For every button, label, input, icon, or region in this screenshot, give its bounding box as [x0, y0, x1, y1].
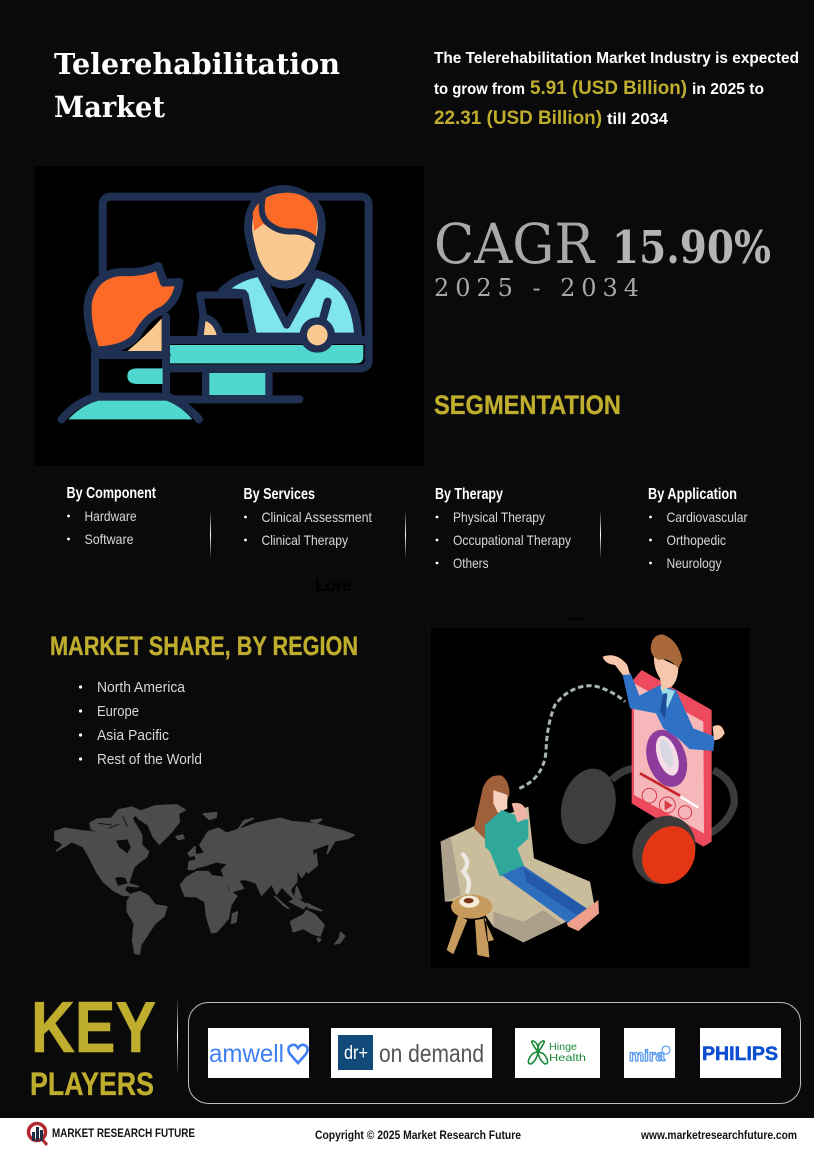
world map	[55, 805, 354, 954]
logo: amwell	[208, 1028, 309, 1078]
armchair	[441, 807, 594, 942]
arctic islands	[90, 807, 142, 843]
segment column: by services: Clinical Therapy	[262, 532, 348, 548]
market share heading: MARKET SHARE, BY REGION	[50, 631, 358, 661]
CAGR: 15.90%	[612, 221, 771, 274]
greenland	[135, 805, 185, 844]
segment column: by services	[244, 486, 372, 548]
region list	[79, 679, 202, 768]
dotted speech trail	[519, 686, 625, 788]
market forecast text: 22.31 (USD Billion)	[434, 108, 602, 129]
region list: Asia Pacific	[97, 727, 169, 744]
phone	[632, 670, 712, 847]
segment column: by services: By Services	[244, 486, 315, 503]
segment column: by therapy: Physical Therapy	[453, 509, 545, 525]
region list: Europe	[97, 703, 139, 720]
microphone badge	[639, 724, 694, 792]
CAGR: CAGR	[434, 212, 596, 276]
segmentation heading: SEGMENTATION	[434, 390, 621, 420]
logo: philips: PHILIPS	[702, 1044, 778, 1065]
key players panel	[188, 1002, 800, 1104]
logo: hinge health: Hinge	[549, 1042, 577, 1053]
north america	[55, 828, 148, 895]
key players heading: PLAYERS	[30, 1066, 154, 1102]
segment column: by therapy: Others	[453, 555, 488, 571]
logo: hinge health: Health	[549, 1053, 586, 1064]
logo: mira: mira	[629, 1048, 665, 1065]
footer	[0, 1118, 814, 1150]
segment column: by component: By Component	[66, 485, 157, 502]
faint leftover text: Lore	[315, 575, 352, 595]
caribbean	[123, 884, 138, 887]
segment column: by component: Software	[84, 531, 134, 547]
woman	[474, 775, 509, 839]
segment column: by application: Neurology	[666, 555, 722, 571]
logo: mira	[624, 1028, 675, 1078]
icon: telehealth doctor on monitor	[34, 166, 424, 466]
logo: amwell: amwell	[209, 1040, 284, 1068]
segment column: by application: Orthopedic	[666, 532, 726, 548]
title: Market	[54, 90, 166, 124]
side table and cup	[447, 915, 494, 958]
left ear cup	[553, 763, 623, 850]
segment column: by therapy: By Therapy	[435, 486, 503, 503]
south america	[127, 892, 167, 954]
segment column: by services: Clinical Assessment	[262, 509, 372, 525]
key players heading: KEY	[31, 988, 156, 1068]
footer: Copyright © 2025 Market Research Future	[315, 1128, 521, 1142]
segment column: by component: Hardware	[84, 508, 137, 524]
region list: Rest of the World	[97, 751, 202, 768]
headphone band	[612, 768, 734, 838]
africa	[181, 872, 237, 933]
CAGR: 2025 - 2034	[434, 274, 639, 302]
market forecast text: till 2034	[607, 111, 668, 128]
market forecast text: to grow from	[434, 81, 525, 98]
australia	[291, 911, 324, 936]
segment column: by application	[648, 486, 748, 571]
player buttons	[642, 788, 657, 803]
market forecast text: 5.91 (USD Billion)	[530, 78, 687, 99]
monitor stand	[206, 369, 269, 399]
europe and asia	[188, 818, 354, 900]
key players heading	[30, 988, 156, 1102]
man in phone	[623, 673, 715, 751]
steam	[462, 853, 469, 893]
bays and straits	[116, 839, 131, 853]
segment column: by therapy: Occupational Therapy	[453, 532, 571, 548]
illustration: remote voice consultation	[431, 628, 750, 968]
logo: philips	[700, 1028, 781, 1078]
region list: North America	[97, 679, 186, 696]
market forecast text: in 2025 to	[692, 81, 764, 98]
segment column: by therapy	[435, 486, 571, 571]
logo: hinge health	[515, 1028, 600, 1078]
right ear cup	[620, 805, 708, 895]
segment column: by application: By Application	[648, 486, 737, 503]
doctor head and hair	[248, 189, 322, 285]
title: Telerehabilitation	[54, 47, 340, 81]
monitor base band	[170, 345, 363, 363]
title	[54, 47, 340, 124]
clipboard and pen hand	[200, 295, 253, 337]
footer: MARKET RESEARCH FUTURE	[52, 1126, 195, 1140]
segment column: by application: Cardiovascular	[666, 509, 748, 525]
CAGR	[434, 212, 771, 302]
southeast asia islands	[275, 887, 322, 911]
market forecast text	[434, 50, 799, 129]
segment column: by component	[66, 485, 157, 547]
monitor frame	[103, 197, 369, 368]
logo: dr on demand	[331, 1028, 492, 1078]
doctor body	[222, 273, 358, 337]
logo: dr on demand: dr+	[344, 1043, 368, 1064]
patient	[95, 317, 166, 397]
logo: dr on demand: on demand	[379, 1040, 484, 1068]
market forecast text: The Telerehabilitation Market Industry is expected	[434, 50, 799, 67]
marks	[568, 618, 582, 620]
japan	[306, 853, 317, 873]
footer logo	[28, 1124, 47, 1145]
